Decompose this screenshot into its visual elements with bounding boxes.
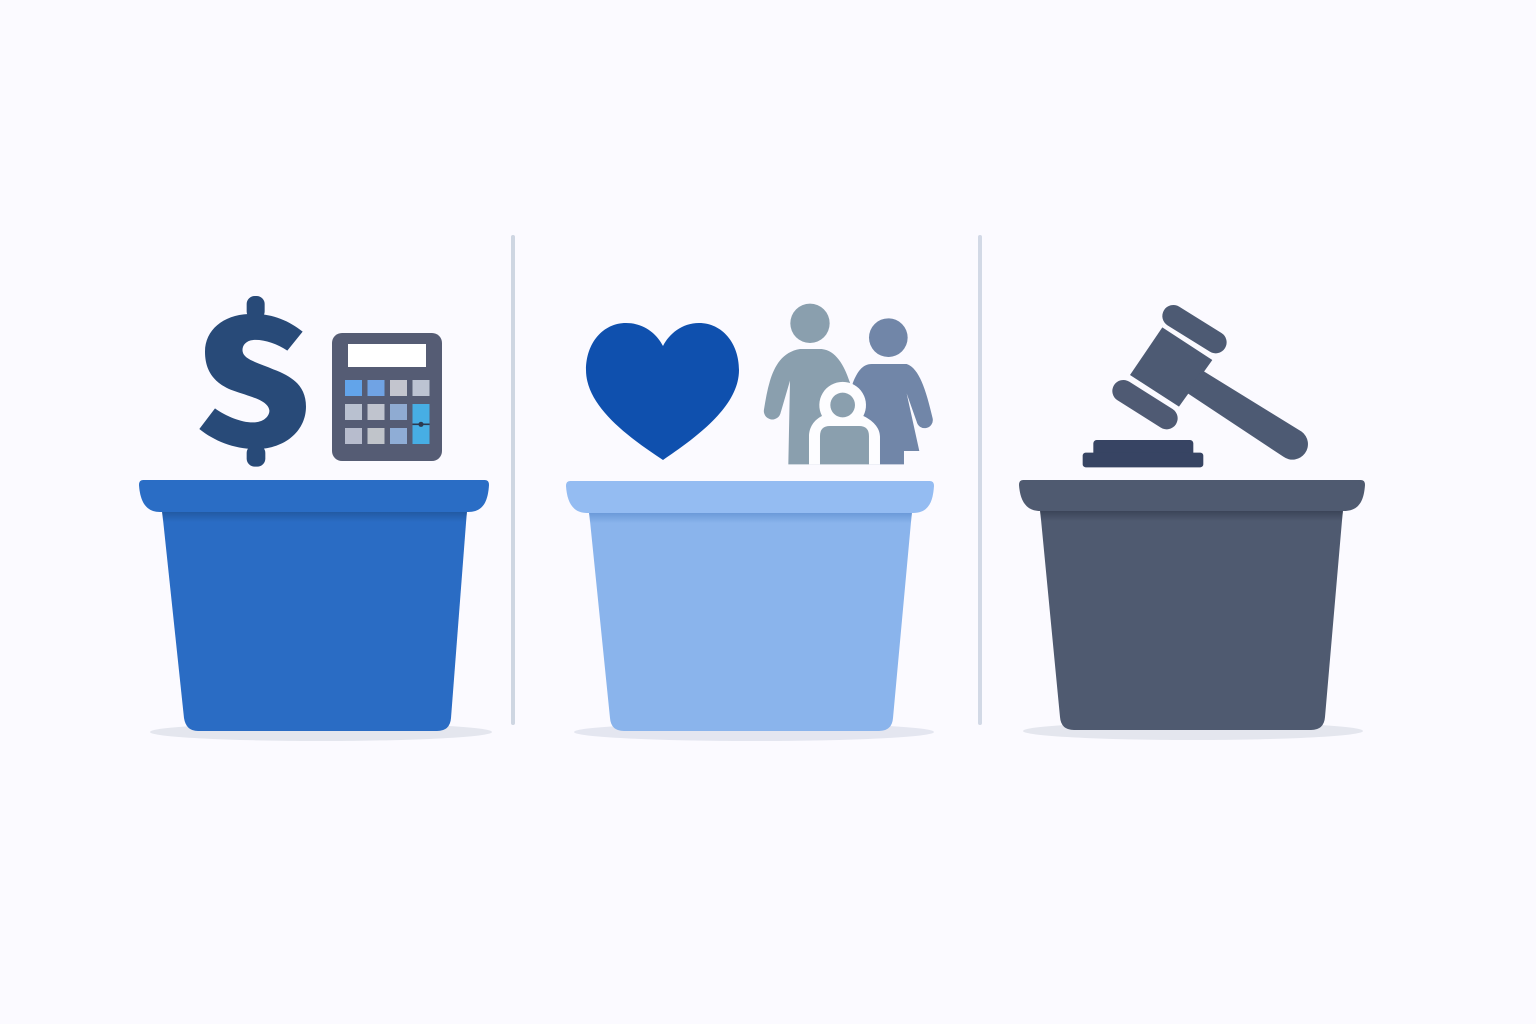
divider: right bbox=[978, 235, 982, 725]
bucket rim bbox=[139, 480, 489, 512]
icon: calculator bbox=[332, 333, 442, 461]
icon: family bbox=[764, 304, 933, 464]
bucket rim bbox=[566, 481, 934, 513]
bucket shadow bbox=[574, 723, 934, 741]
icon: heart bbox=[586, 323, 739, 460]
bucket: blue bbox=[139, 480, 492, 741]
icon: dollar sign bbox=[199, 296, 306, 467]
bucket shadow bbox=[150, 723, 492, 741]
panel: legal bbox=[1019, 316, 1365, 740]
bucket shadow bbox=[1023, 722, 1363, 740]
panel: finance bbox=[139, 296, 492, 741]
bucket: light blue bbox=[566, 481, 934, 741]
divider: left bbox=[511, 235, 515, 725]
bucket: slate bbox=[1019, 480, 1365, 740]
panel: family and health bbox=[566, 304, 934, 741]
icon: gavel bbox=[1083, 316, 1308, 467]
bucket rim bbox=[1019, 480, 1365, 511]
